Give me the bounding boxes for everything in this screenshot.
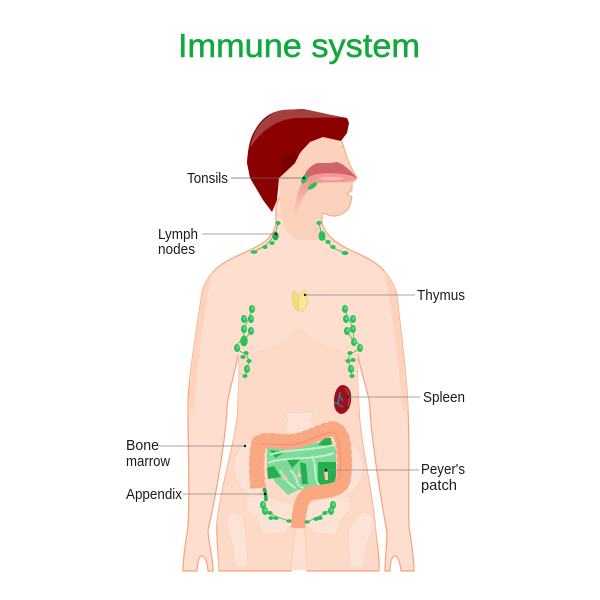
spine [283,412,315,434]
lymph nodes: left armpit [234,305,255,378]
label: Bone marrow: marrow [126,453,170,470]
right femur [348,512,375,568]
left iliac wing [234,440,262,498]
lymph nodes: right groin [304,501,336,524]
small intestine [267,437,336,495]
label: Spleen [347,389,465,406]
label: Lymph nodes [158,226,277,258]
label: Bone marrow: Bone [126,437,159,454]
label: Peyer's patch: patch [421,477,457,494]
pelvis and hip bones [227,412,375,568]
title: Immune system [178,27,420,64]
spleen [334,385,351,414]
arm and shoulder shading [188,271,408,410]
face and neck [279,137,357,240]
lymph nodes: right armpit [342,305,363,378]
throat and mouth [295,162,357,215]
appendix [264,488,266,501]
label: Thymus: Thymus [417,287,465,304]
left femur [227,512,248,568]
label: Peyer's patch: Peyer's [421,461,465,478]
face outline [322,141,357,216]
thymus [291,290,309,312]
label: Tonsils: Tonsils [187,170,228,187]
tonsils [300,173,318,191]
label: Lymph nodes: nodes [158,241,195,258]
hair [247,109,349,212]
large intestine [257,429,344,528]
label: Appendix: Appendix [126,486,182,503]
chest shading [217,329,379,570]
right pubic bone [304,495,350,535]
label: Tonsils [187,170,305,187]
body silhouette [183,150,414,571]
left pubic bone [246,495,294,535]
label: Peyer's patch [325,461,465,494]
lymph nodes: left groin [260,501,292,523]
right iliac wing [335,440,363,498]
label: Bone marrow [126,437,246,470]
label: Spleen: Spleen [423,389,465,406]
lymph nodes: neck left [250,221,281,254]
lymph nodes: neck right [316,221,348,255]
human body [183,137,414,571]
label: Lymph nodes: Lymph [158,226,198,243]
